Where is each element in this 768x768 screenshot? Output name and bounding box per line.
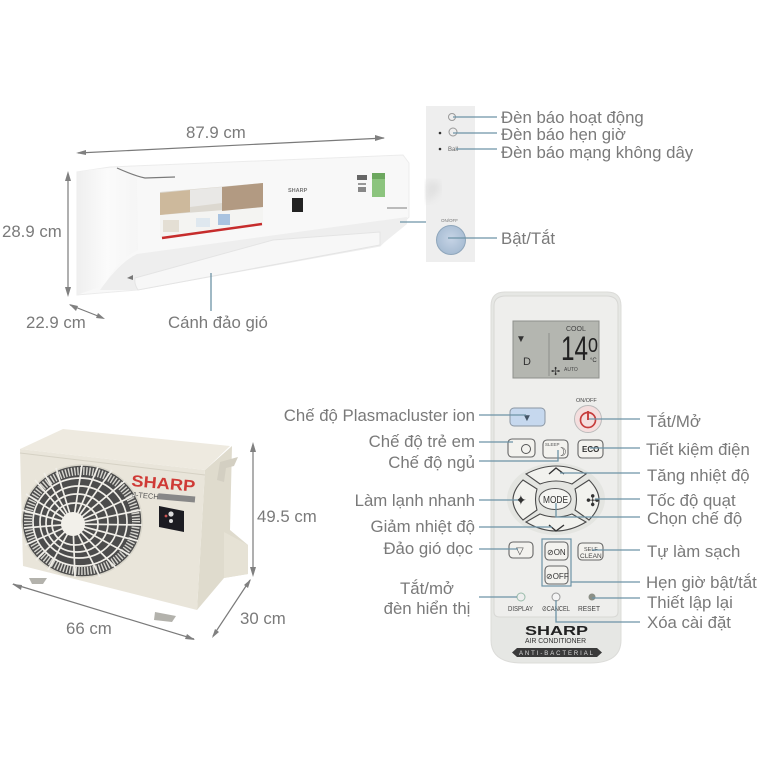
- label: Giảm nhiệt độ: Giảm nhiệt độ: [371, 517, 475, 536]
- label: Chế độ ngủ: Chế độ ngủ: [388, 453, 475, 472]
- label: Đảo gió dọc: [383, 539, 518, 558]
- button: swing: [509, 542, 533, 558]
- display panel: Ball: [448, 147, 458, 153]
- connector: indoor unit to panel: [400, 221, 426, 223]
- product sticker: [160, 183, 263, 238]
- label: Tự làm sạch: Tự làm sạch: [647, 542, 740, 561]
- button: power: ON/OFF: [576, 398, 597, 404]
- LCD screen: 0: [588, 335, 598, 357]
- button: self clean: CLEAN: [580, 553, 602, 560]
- dimension: 66 cm: 66 cm: [66, 619, 112, 638]
- label: Xóa cài đặt: Xóa cài đặt: [647, 613, 731, 632]
- dimension: width 87.9 cm: 87.9 cm: [186, 123, 246, 142]
- button: power: [574, 398, 602, 432]
- anti-bacterial strip: [512, 648, 602, 657]
- label: Chế độ trẻ em: Chế độ trẻ em: [369, 432, 475, 451]
- dimension: height 28.9 cm: [2, 171, 71, 297]
- label: Xóa cài đặt: [556, 600, 731, 632]
- button: sleep: SLEEP: [545, 442, 560, 447]
- label: Tiết kiệm điện: Tiết kiệm điện: [646, 440, 750, 459]
- label: Chế độ ngủ: [388, 450, 558, 472]
- directional pad: MODE: [543, 495, 568, 506]
- LCD screen: COOL: [566, 326, 586, 333]
- anti-bacterial strip: ANTI-BACTERIAL: [519, 651, 594, 657]
- LCD screen: 14: [561, 330, 588, 368]
- J-TECH logo: [132, 490, 195, 504]
- small buttons row: ⊘CANCEL: [542, 604, 570, 613]
- label: Tăng nhiệt độ: Tăng nhiệt độ: [647, 466, 750, 485]
- SHARP logo: SHARP: [525, 623, 588, 638]
- label: Đèn báo mạng không dây: Đèn báo mạng không dây: [501, 143, 694, 162]
- button: child mode: [508, 439, 535, 457]
- button: Plasmacluster: ▼: [522, 413, 532, 424]
- LCD screen: ✢: [551, 366, 560, 378]
- label: Tắt/Mở: [589, 412, 701, 431]
- dimension: width 87.9 cm: [76, 123, 385, 155]
- button: self clean: SELF: [584, 547, 598, 553]
- brand logo: SHARP: [288, 188, 308, 194]
- button: eco: ECO: [582, 445, 599, 454]
- plasmacluster badge: [292, 198, 303, 212]
- air conditioner text: AIR CONDITIONER: [525, 638, 586, 645]
- dimension: 30 cm: 30 cm: [240, 609, 286, 628]
- label: Đèn báo hoạt động: Đèn báo hoạt động: [501, 108, 644, 127]
- mounting feet: [29, 578, 176, 622]
- label: Tắt/mở đèn hiển thị: Tắt/mở: [400, 579, 454, 598]
- dimension: 66 cm: [12, 584, 195, 640]
- timer box: ⊘OFF: [546, 572, 569, 581]
- energy label: [357, 173, 385, 197]
- LCD screen: ▼: [516, 334, 526, 345]
- dimension: depth 22.9 cm: 22.9 cm: [26, 313, 86, 332]
- dimension: height 28.9 cm: 28.9 cm: [2, 222, 62, 241]
- small buttons row: DISPLAY: [508, 604, 533, 613]
- model strip: [387, 207, 407, 209]
- dimension: 49.5 cm: 49.5 cm: [257, 507, 317, 526]
- indoor unit: [77, 155, 409, 295]
- button: sleep: ☽: [556, 445, 567, 459]
- LCD screen: AUTO: [564, 367, 578, 373]
- remote control: [491, 292, 621, 663]
- LCD screen: D: [523, 356, 531, 368]
- button: eco: [578, 440, 603, 458]
- label: Làm lạnh nhanh: Làm lạnh nhanh: [355, 491, 475, 510]
- label: Thiết lập lại: Thiết lập lại: [647, 593, 733, 612]
- label: Tắt/mở đèn hiển thị: đèn hiển thị: [384, 599, 470, 618]
- display panel: ON/OFF: [441, 218, 458, 223]
- label: Bật/Tắt: Bật/Tắt: [501, 229, 555, 248]
- directional pad: ✣: [586, 493, 599, 510]
- display panel: [426, 106, 475, 262]
- label: Tắt/mở đèn hiển thị: [384, 579, 517, 618]
- dimension: 49.5 cm: [250, 442, 317, 577]
- SHARP logo: SHARP: [131, 473, 196, 496]
- button: Plasmacluster: [510, 408, 545, 426]
- label: Hẹn giờ bật/tắt: Hẹn giờ bật/tắt: [646, 573, 757, 592]
- directional pad: ✦: [515, 492, 527, 508]
- directional pad: [507, 463, 605, 535]
- label: Tốc độ quạt: Tốc độ quạt: [647, 491, 736, 510]
- label: Cánh đảo gió: [168, 273, 268, 332]
- LCD screen: °C: [590, 358, 597, 364]
- label: Cánh đảo gió: Cánh đảo gió: [168, 313, 268, 332]
- J-TECH logo: J-TECH: [132, 490, 159, 501]
- label: Chọn chế độ: [556, 503, 742, 528]
- label: Tắt/Mở: Tắt/Mở: [647, 412, 701, 431]
- button: swing: ▽: [516, 546, 524, 557]
- button: self clean: [578, 543, 603, 560]
- vent mark: [127, 275, 133, 280]
- label: Bật/Tắt: [448, 229, 555, 248]
- small buttons row: RESET: [578, 604, 600, 613]
- fan grille: [22, 465, 142, 577]
- label: Chế độ Plasmacluster ion: Chế độ Plasmacluster ion: [284, 406, 475, 425]
- label: Đảo gió dọc: Đảo gió dọc: [383, 539, 473, 558]
- dimension: 30 cm: [212, 579, 286, 638]
- plasmacluster badge: [159, 506, 184, 532]
- label: Đèn báo hẹn giờ: Đèn báo hẹn giờ: [501, 125, 626, 144]
- label: Chọn chế độ: Chọn chế độ: [647, 509, 742, 528]
- LCD screen: [513, 321, 599, 378]
- button: sleep: [543, 440, 568, 459]
- timer box: [542, 539, 571, 586]
- outdoor unit: [20, 429, 248, 622]
- small buttons row: [508, 593, 600, 613]
- dimension: depth 22.9 cm: [26, 304, 105, 332]
- timer box: ⊘ON: [547, 548, 566, 557]
